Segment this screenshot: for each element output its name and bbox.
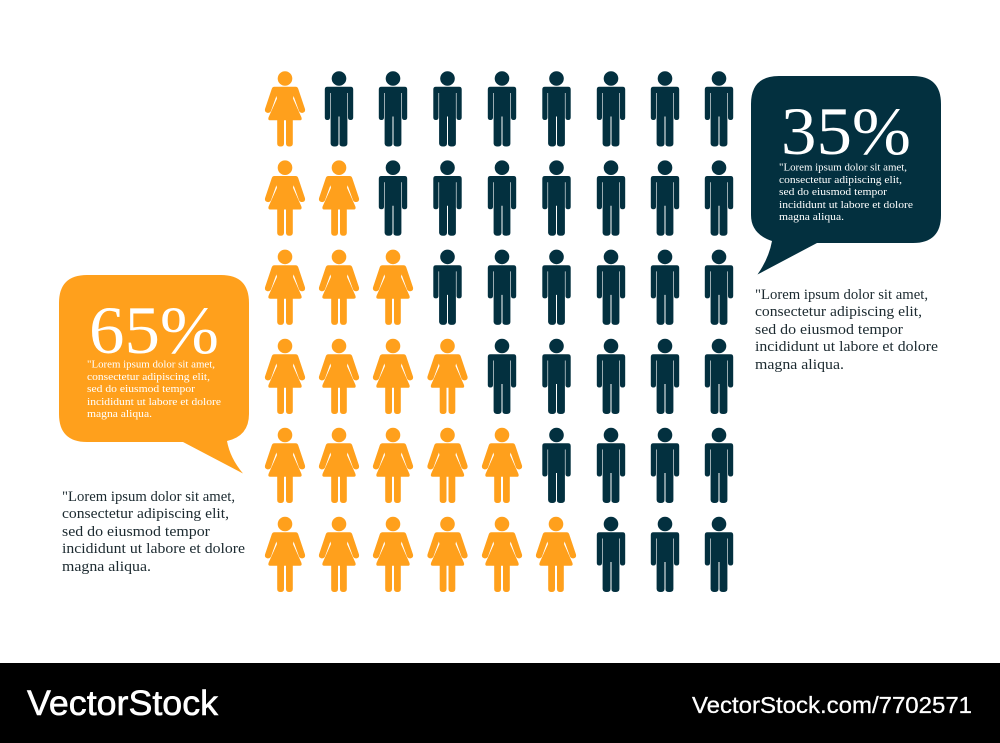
text block under 65% bubble: sed do eiusmod tempor xyxy=(62,524,210,540)
text block under 65% bubble: magna aliqua. xyxy=(62,559,151,575)
row 5: 5 women, 4 men xyxy=(265,428,733,503)
bubble body text xyxy=(779,162,913,223)
footer bar xyxy=(0,663,1000,743)
text block under 35% bubble: "Lorem ipsum dolor sit amet, xyxy=(755,287,928,303)
bubble body text: sed do eiusmod tempor xyxy=(779,186,887,198)
text block under 35% bubble: consectetur adipiscing elit, xyxy=(755,304,922,320)
footer URL: VectorStock.com/7702571 xyxy=(692,692,972,718)
bubble shape xyxy=(751,76,941,274)
row 4: 4 women, 5 men xyxy=(265,339,733,414)
row 6: 6 women, 3 men xyxy=(265,517,733,592)
bubble shape xyxy=(59,275,249,474)
callout: 35% dark speech bubble xyxy=(751,76,941,274)
bubble body text: "Lorem ipsum dolor sit amet, xyxy=(779,162,907,174)
text block under 35% bubble xyxy=(755,287,938,373)
bubble body text: incididunt ut labore et dolore xyxy=(87,396,221,408)
pictogram grid: women and men xyxy=(265,71,733,592)
stat: 35%: 35% xyxy=(781,93,911,169)
bubble body text: consectetur adipiscing elit, xyxy=(779,174,902,186)
text block under 65% bubble: "Lorem ipsum dolor sit amet, xyxy=(62,489,235,505)
text block under 35% bubble: incididunt ut labore et dolore xyxy=(755,339,938,355)
text block under 65% bubble xyxy=(62,489,245,575)
text block under 65% bubble: incididunt ut labore et dolore xyxy=(62,541,245,557)
bubble body text: "Lorem ipsum dolor sit amet, xyxy=(87,358,215,370)
bubble body text xyxy=(87,358,221,420)
bubble body text: magna aliqua. xyxy=(87,408,152,420)
bubble body text: sed do eiusmod tempor xyxy=(87,383,195,395)
row 2: 2 women, 7 men xyxy=(265,160,733,236)
stat: 65%: 65% xyxy=(89,292,219,368)
callout: 65% orange speech bubble xyxy=(59,275,249,474)
row 1: 1 woman, 8 men xyxy=(265,71,733,146)
row 3: 3 women, 6 men xyxy=(265,250,733,325)
text block under 35% bubble: magna aliqua. xyxy=(755,357,844,373)
bubble body text: incididunt ut labore et dolore xyxy=(779,199,913,211)
bubble body text: magna aliqua. xyxy=(779,211,844,223)
text block under 35% bubble: sed do eiusmod tempor xyxy=(755,322,903,338)
footer logo text: VectorStock xyxy=(27,684,219,723)
text block under 65% bubble: consectetur adipiscing elit, xyxy=(62,506,229,522)
bubble body text: consectetur adipiscing elit, xyxy=(87,371,210,383)
